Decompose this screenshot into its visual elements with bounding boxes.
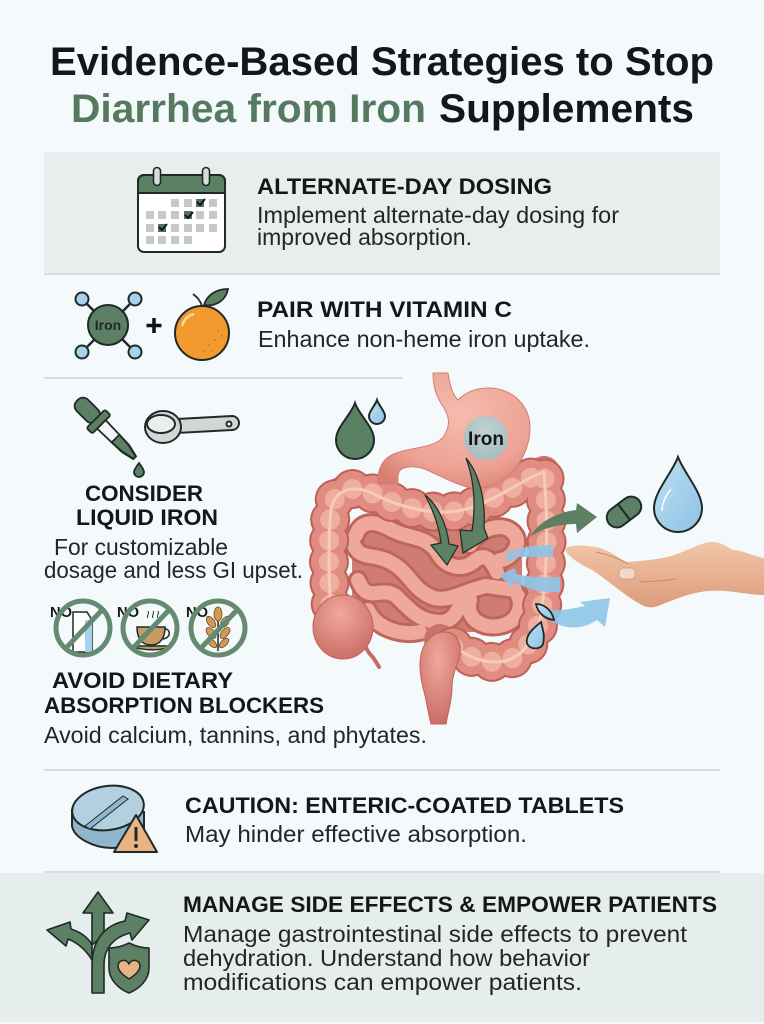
panel: avoid dietary absorption blockers <box>44 601 427 748</box>
icon: iron molecule <box>76 292 142 358</box>
body: alternate-day dosing: Implement alternate-day dosing for <box>257 202 619 228</box>
body: alternate-day dosing: improved absorption. <box>257 224 472 250</box>
icon: green and blue drops <box>336 400 385 459</box>
icon: blue drops <box>527 604 554 648</box>
heading: alternate-day dosing: ALTERNATE-DAY DOSING <box>257 174 552 199</box>
body: avoid dietary absorption blockers: Avoid calcium, tannins, and phytates. <box>44 722 427 748</box>
heading: pair with vitamin c: PAIR WITH VITAMIN C <box>257 297 512 322</box>
panel: enteric-coated caution <box>69 781 624 852</box>
title: Evidence-Based Strategies to Stop <box>50 40 714 84</box>
icon: no coffee: NO <box>117 605 139 621</box>
heading: avoid dietary absorption blockers <box>44 668 324 718</box>
heading: consider liquid iron: LIQUID IRON <box>76 505 218 530</box>
icon: orange <box>175 289 229 360</box>
iron ball: Iron <box>468 429 504 450</box>
icon: green pill <box>603 493 645 531</box>
icon: plus <box>146 318 162 333</box>
panel: manage side effects <box>0 872 764 1022</box>
appendix <box>360 640 379 667</box>
panel: pair with vitamin c <box>76 289 590 360</box>
body: consider liquid iron <box>44 534 303 583</box>
panel: alternate-day dosing <box>44 152 720 274</box>
icon: dropper <box>68 391 144 477</box>
title: Supplements <box>439 87 694 131</box>
heading: avoid dietary absorption blockers: AVOID DIETARY <box>52 668 233 693</box>
icon: tablet with warning <box>69 781 157 852</box>
icon: iron molecule: Iron <box>95 317 121 333</box>
heading: manage side effects: MANAGE SIDE EFFECTS & EMPOWER PATIENTS <box>183 892 717 917</box>
panel: consider liquid iron <box>44 391 303 583</box>
iron ball <box>464 416 508 460</box>
heading: avoid dietary absorption blockers: ABSORPTION BLOCKERS <box>44 693 324 718</box>
heading: caution: CAUTION: ENTERIC-COATED TABLETS <box>185 793 624 818</box>
icon: branching arrows with shield <box>47 892 149 993</box>
icon: open hand <box>566 542 764 607</box>
icon: no milk <box>50 601 110 655</box>
body: caution: May hinder effective absorption. <box>185 821 527 847</box>
icon: calendar <box>138 168 225 252</box>
icon: no milk: NO <box>50 605 72 621</box>
small intestine <box>352 520 522 633</box>
body: manage side effects: modifications can empower patients. <box>183 969 582 995</box>
body: manage side effects: dehydration. Understand how behavior <box>183 945 590 971</box>
cecum <box>313 595 373 659</box>
arrow: green into intestine right <box>460 458 488 553</box>
title: Diarrhea from Iron <box>71 87 426 131</box>
icon: measuring spoon <box>145 411 239 443</box>
illustration: digestive system <box>313 373 764 724</box>
large intestine <box>329 472 547 662</box>
stomach <box>378 373 530 488</box>
title <box>50 40 714 131</box>
body: pair with vitamin c: Enhance non-heme iron uptake. <box>258 326 590 352</box>
heading: consider liquid iron: CONSIDER <box>85 481 203 506</box>
body: manage side effects: Manage gastrointestinal side effects to prevent <box>183 921 688 947</box>
arrows: blue swirl <box>499 545 610 628</box>
body: consider liquid iron: dosage and less GI upset. <box>44 557 303 583</box>
rectum <box>420 632 460 724</box>
arrow: green out to pill <box>530 503 597 537</box>
icon: no grain <box>186 601 245 655</box>
body: consider liquid iron: For customizable <box>54 534 228 560</box>
body: manage side effects <box>183 921 688 995</box>
heading: consider liquid iron <box>76 481 218 530</box>
icon: large water drop <box>654 457 702 532</box>
arrow: green into intestine left <box>425 495 458 565</box>
body: alternate-day dosing <box>257 202 619 250</box>
icon: no grain: NO <box>186 605 208 621</box>
icon: no coffee <box>117 601 177 655</box>
